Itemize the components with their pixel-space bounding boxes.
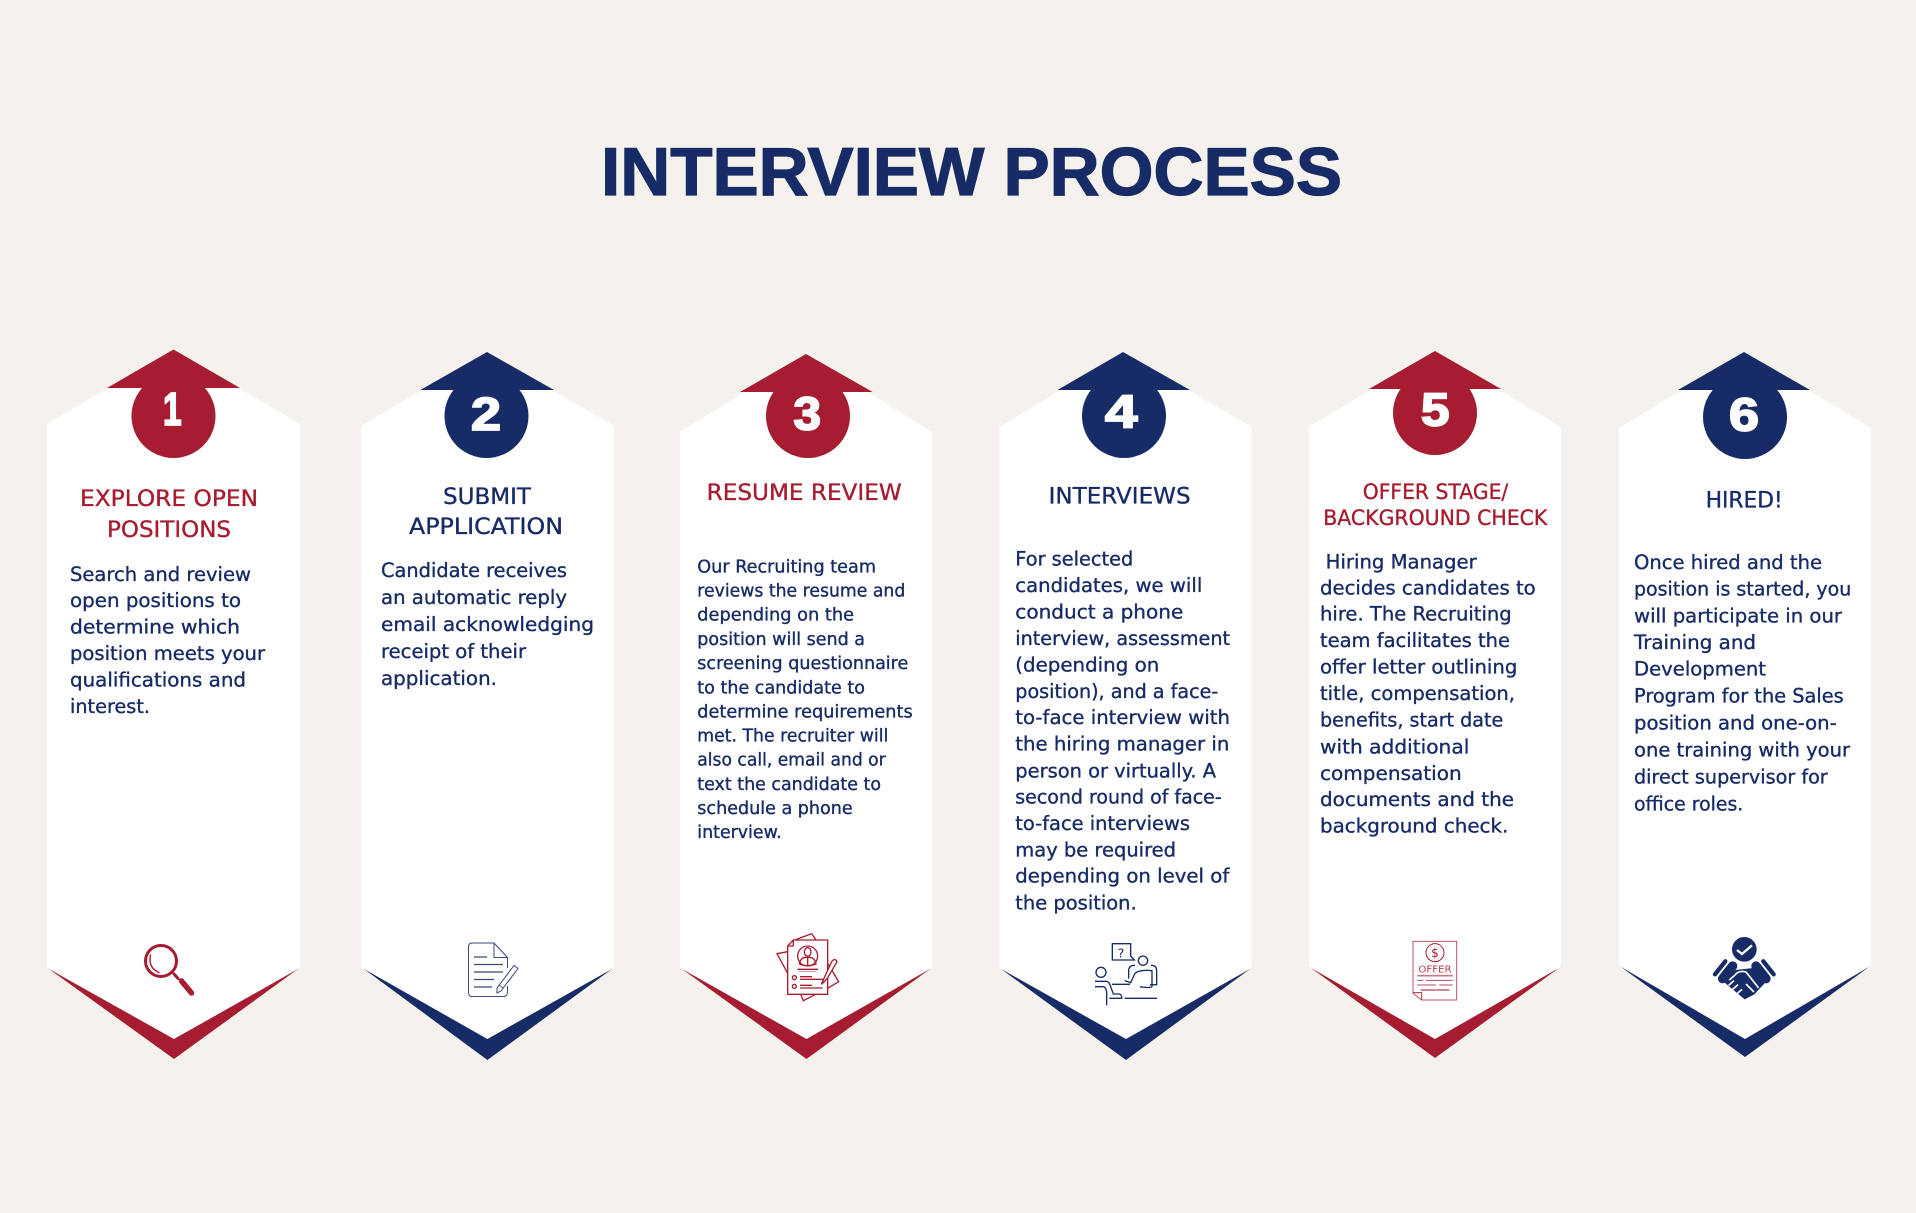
body text 6	[1633, 551, 1851, 816]
icon: offer letter	[1413, 941, 1457, 1000]
number badge 6	[1678, 352, 1810, 459]
heading 5: OFFER STAGE/	[1363, 480, 1509, 504]
number badge 3: 3	[794, 388, 821, 440]
icon: magnifying glass	[146, 946, 192, 993]
body text 6: Training and	[1633, 631, 1756, 654]
body text 1: position meets your	[70, 642, 266, 665]
body text 3: determine requirements	[697, 702, 913, 722]
body text 5: title, compensation,	[1320, 682, 1515, 705]
body text 4: (depending on	[1015, 654, 1159, 677]
body text 1: interest.	[70, 695, 150, 718]
body text 1: open positions to	[70, 589, 241, 612]
panel: step 5 offer stage	[1309, 351, 1561, 1058]
body text 2: Candidate receives	[381, 559, 567, 582]
number badge 1: 1	[163, 383, 182, 435]
body text 5	[1320, 550, 1536, 838]
bottom chevron 4	[1001, 969, 1250, 1060]
bottom chevron 2	[364, 969, 612, 1060]
body text 1: Search and review	[70, 563, 251, 586]
body text 3: screening questionnaire	[697, 654, 908, 674]
number badge 6: 6	[1729, 388, 1759, 440]
body text 5: decides candidates to	[1320, 576, 1536, 599]
number badge 5	[1369, 351, 1501, 455]
body text 4: interview, assessment	[1015, 627, 1230, 650]
body text 4: to-face interviews	[1015, 812, 1190, 835]
body text 1: determine which	[70, 616, 240, 639]
body text 5: team facilitates the	[1320, 629, 1510, 652]
panel: step 4 interviews	[1000, 352, 1252, 1060]
body text 5: Hiring Manager	[1326, 550, 1478, 573]
body text 3: to the candidate to	[697, 678, 865, 698]
heading 1	[80, 487, 258, 543]
heading 1: POSITIONS	[107, 518, 231, 543]
body text 6: office roles.	[1634, 793, 1743, 816]
body text 3: position will send a	[697, 630, 865, 650]
panel: step 3 resume review	[680, 354, 932, 1059]
bottom chevron 3	[682, 969, 930, 1059]
body text 5: background check.	[1320, 815, 1508, 838]
body text 5: offer letter outlining	[1320, 656, 1517, 679]
body text 6: position and one-on-	[1634, 712, 1837, 735]
body text 3: depending on the	[697, 606, 854, 626]
body text 4: conduct a phone	[1015, 601, 1183, 624]
body text 4: candidates, we will	[1015, 574, 1202, 597]
body text 6: Program for the Sales	[1634, 685, 1844, 708]
body text 3: Our Recruiting team	[697, 558, 876, 578]
body text 2: application.	[381, 667, 497, 690]
heading 1: EXPLORE OPEN	[80, 487, 258, 512]
body text 4: to-face interview with	[1015, 706, 1230, 729]
body text 4: the hiring manager in	[1015, 733, 1229, 756]
body text 5: benefits, start date	[1320, 709, 1503, 732]
body text 3: interview.	[697, 823, 782, 843]
body text 2: email acknowledging	[381, 613, 594, 636]
bottom chevron 6	[1621, 967, 1869, 1057]
body text 4: depending on level of	[1015, 865, 1230, 888]
icon: interview at desk: ?	[1118, 945, 1124, 960]
body text 3: text the candidate to	[697, 775, 881, 795]
number badge 5: 5	[1421, 384, 1450, 436]
heading 6: HIRED!	[1706, 488, 1783, 513]
body text 2: an automatic reply	[381, 586, 567, 609]
bottom chevron 1	[49, 969, 298, 1059]
icon: offer letter: OFFER	[1418, 965, 1452, 976]
title: INTERVIEW PROCESS	[601, 134, 1342, 210]
heading 5: BACKGROUND CHECK	[1323, 506, 1548, 530]
body text 3: met. The recruiter will	[697, 727, 888, 747]
body text 1	[70, 563, 266, 718]
bottom chevron 5	[1311, 968, 1559, 1058]
body text 6: will participate in our	[1634, 605, 1843, 628]
body text 2	[381, 559, 594, 690]
body text 4	[1015, 548, 1230, 914]
body text 5: documents and the	[1320, 788, 1514, 811]
body text 5: compensation	[1320, 762, 1462, 785]
body text 4: second round of face-	[1015, 786, 1222, 809]
icon: offer letter: $	[1431, 946, 1439, 960]
body text 4: For selected	[1015, 548, 1133, 571]
body text 1: qualifications and	[70, 669, 246, 692]
number badge 1	[107, 350, 240, 458]
panel: step 6 hired	[1619, 352, 1871, 1057]
heading 3: RESUME REVIEW	[707, 481, 902, 506]
body text 4: may be required	[1015, 839, 1176, 862]
number badge 2: 2	[471, 388, 501, 440]
icon: document and pencil	[468, 943, 518, 996]
body text 6: Development	[1634, 658, 1766, 681]
body text 4: person or virtually. A	[1015, 759, 1217, 782]
heading 4: INTERVIEWS	[1049, 484, 1191, 510]
body text 4: the position.	[1015, 891, 1137, 914]
body text 3: reviews the resume and	[697, 582, 905, 602]
panel: step 2 submit application	[361, 352, 614, 1060]
body text 3	[697, 558, 913, 843]
icon: handshake with check	[1715, 937, 1774, 999]
body text 6: one training with your	[1634, 739, 1851, 762]
body text 6: direct supervisor for	[1634, 766, 1829, 789]
icon: resume with pencil	[777, 934, 839, 1001]
icon: interview at desk	[1095, 944, 1157, 1005]
panel: step 1 explore open positions	[47, 350, 300, 1059]
number badge 2	[420, 352, 554, 458]
body text 6: Once hired and the	[1634, 551, 1822, 574]
body text 6: position is started, you	[1634, 578, 1851, 601]
heading 5	[1323, 480, 1548, 530]
body text 3: schedule a phone	[697, 799, 853, 819]
heading 2: SUBMIT	[443, 485, 532, 510]
number badge 3	[740, 354, 873, 458]
body text 5: hire. The Recruiting	[1320, 603, 1512, 626]
body text 2: receipt of their	[381, 640, 527, 663]
body text 3: also call, email and or	[697, 751, 886, 771]
body text 5: with additional	[1320, 735, 1469, 758]
body text 4: position), and a face-	[1015, 680, 1218, 703]
number badge 4: 4	[1105, 386, 1138, 438]
heading 2: APPLICATION	[409, 515, 563, 540]
number badge 4	[1058, 352, 1190, 458]
heading 2	[409, 485, 563, 540]
